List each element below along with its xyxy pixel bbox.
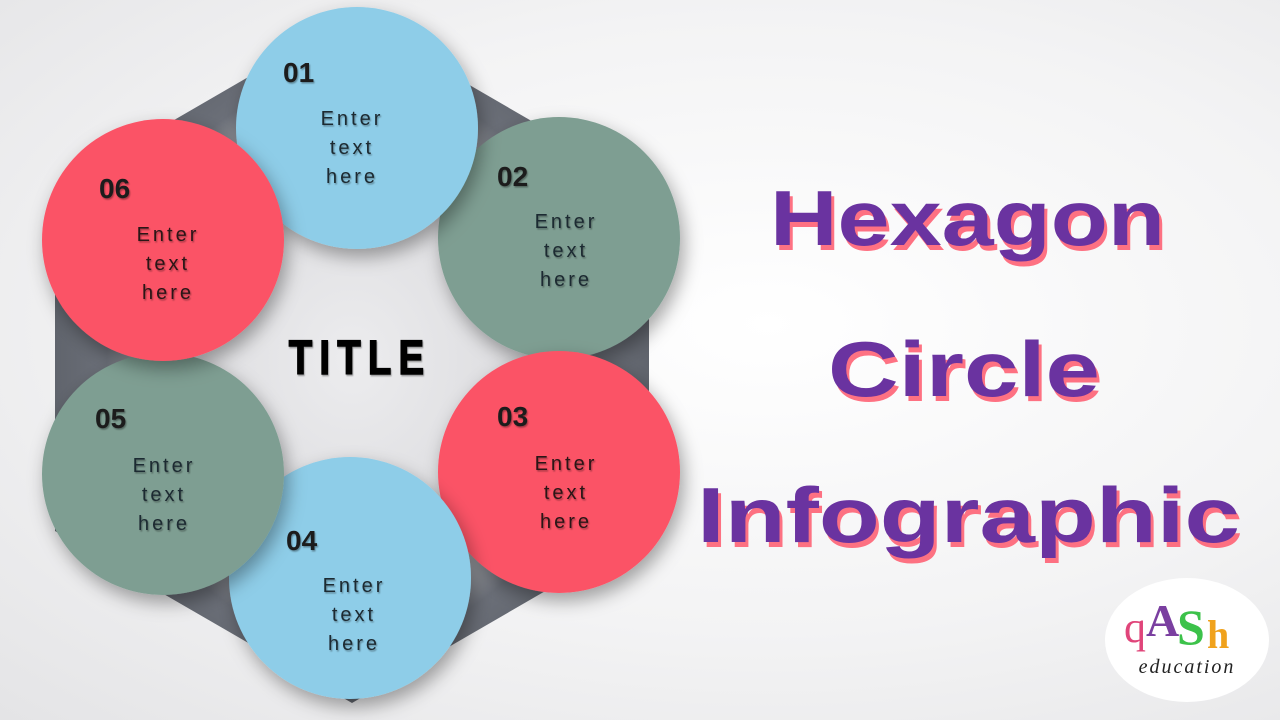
circle 03: Enter xyxy=(535,453,597,475)
circle 05: text xyxy=(142,484,186,506)
circle 03: 03 xyxy=(497,401,528,432)
circle 02: text xyxy=(544,240,588,262)
title: TITLE xyxy=(289,332,431,385)
circle 01: 01 xyxy=(283,57,314,88)
logo: qASh education: q xyxy=(1124,603,1146,652)
circle 03: here xyxy=(540,511,592,533)
circle 05: here xyxy=(138,513,190,535)
logo: qASh education: S xyxy=(1177,599,1205,655)
circle 04 xyxy=(229,457,471,699)
hexagon background xyxy=(55,17,649,703)
circle 06: Enter xyxy=(137,224,199,246)
heading: Hexagon Circle Infographic: Infographic xyxy=(700,476,1243,564)
heading: Hexagon Circle Infographic: Circle xyxy=(828,325,1100,413)
circle 06: here xyxy=(142,282,194,304)
circle 06: text xyxy=(146,253,190,275)
circle 02: 02 xyxy=(497,161,528,192)
circle 04: Enter xyxy=(323,575,385,597)
circle 04: 04 xyxy=(286,525,318,556)
circle 02: Enter xyxy=(535,211,597,233)
circle 01 xyxy=(236,7,478,249)
circle 05 xyxy=(42,353,284,595)
circle 03: text xyxy=(544,482,588,504)
circle 04: here xyxy=(328,633,380,655)
logo: qASh education: education xyxy=(1139,656,1235,678)
heading: Hexagon Circle Infographic xyxy=(697,174,1243,564)
circle 06 xyxy=(42,119,284,361)
heading: Hexagon Circle Infographic: Hexagon xyxy=(770,174,1165,262)
circle 02 xyxy=(438,117,680,359)
circle 01: text xyxy=(330,137,374,159)
logo: qASh education: h xyxy=(1207,612,1229,657)
circle 01: Enter xyxy=(321,108,383,130)
circle 03 xyxy=(438,351,680,593)
heading: Hexagon Circle Infographic: Circle xyxy=(831,330,1103,418)
circle 05: Enter xyxy=(133,455,195,477)
heading: Hexagon Circle Infographic: Infographic xyxy=(697,471,1240,559)
circle 04: text xyxy=(332,604,376,626)
circle 06: 06 xyxy=(99,173,130,204)
circle 01: here xyxy=(326,166,378,188)
logo: qASh education xyxy=(1105,578,1269,702)
heading: Hexagon Circle Infographic: Hexagon xyxy=(773,179,1168,267)
logo: qASh education: A xyxy=(1146,595,1179,646)
circle 05: 05 xyxy=(95,403,126,434)
circle 02: here xyxy=(540,269,592,291)
